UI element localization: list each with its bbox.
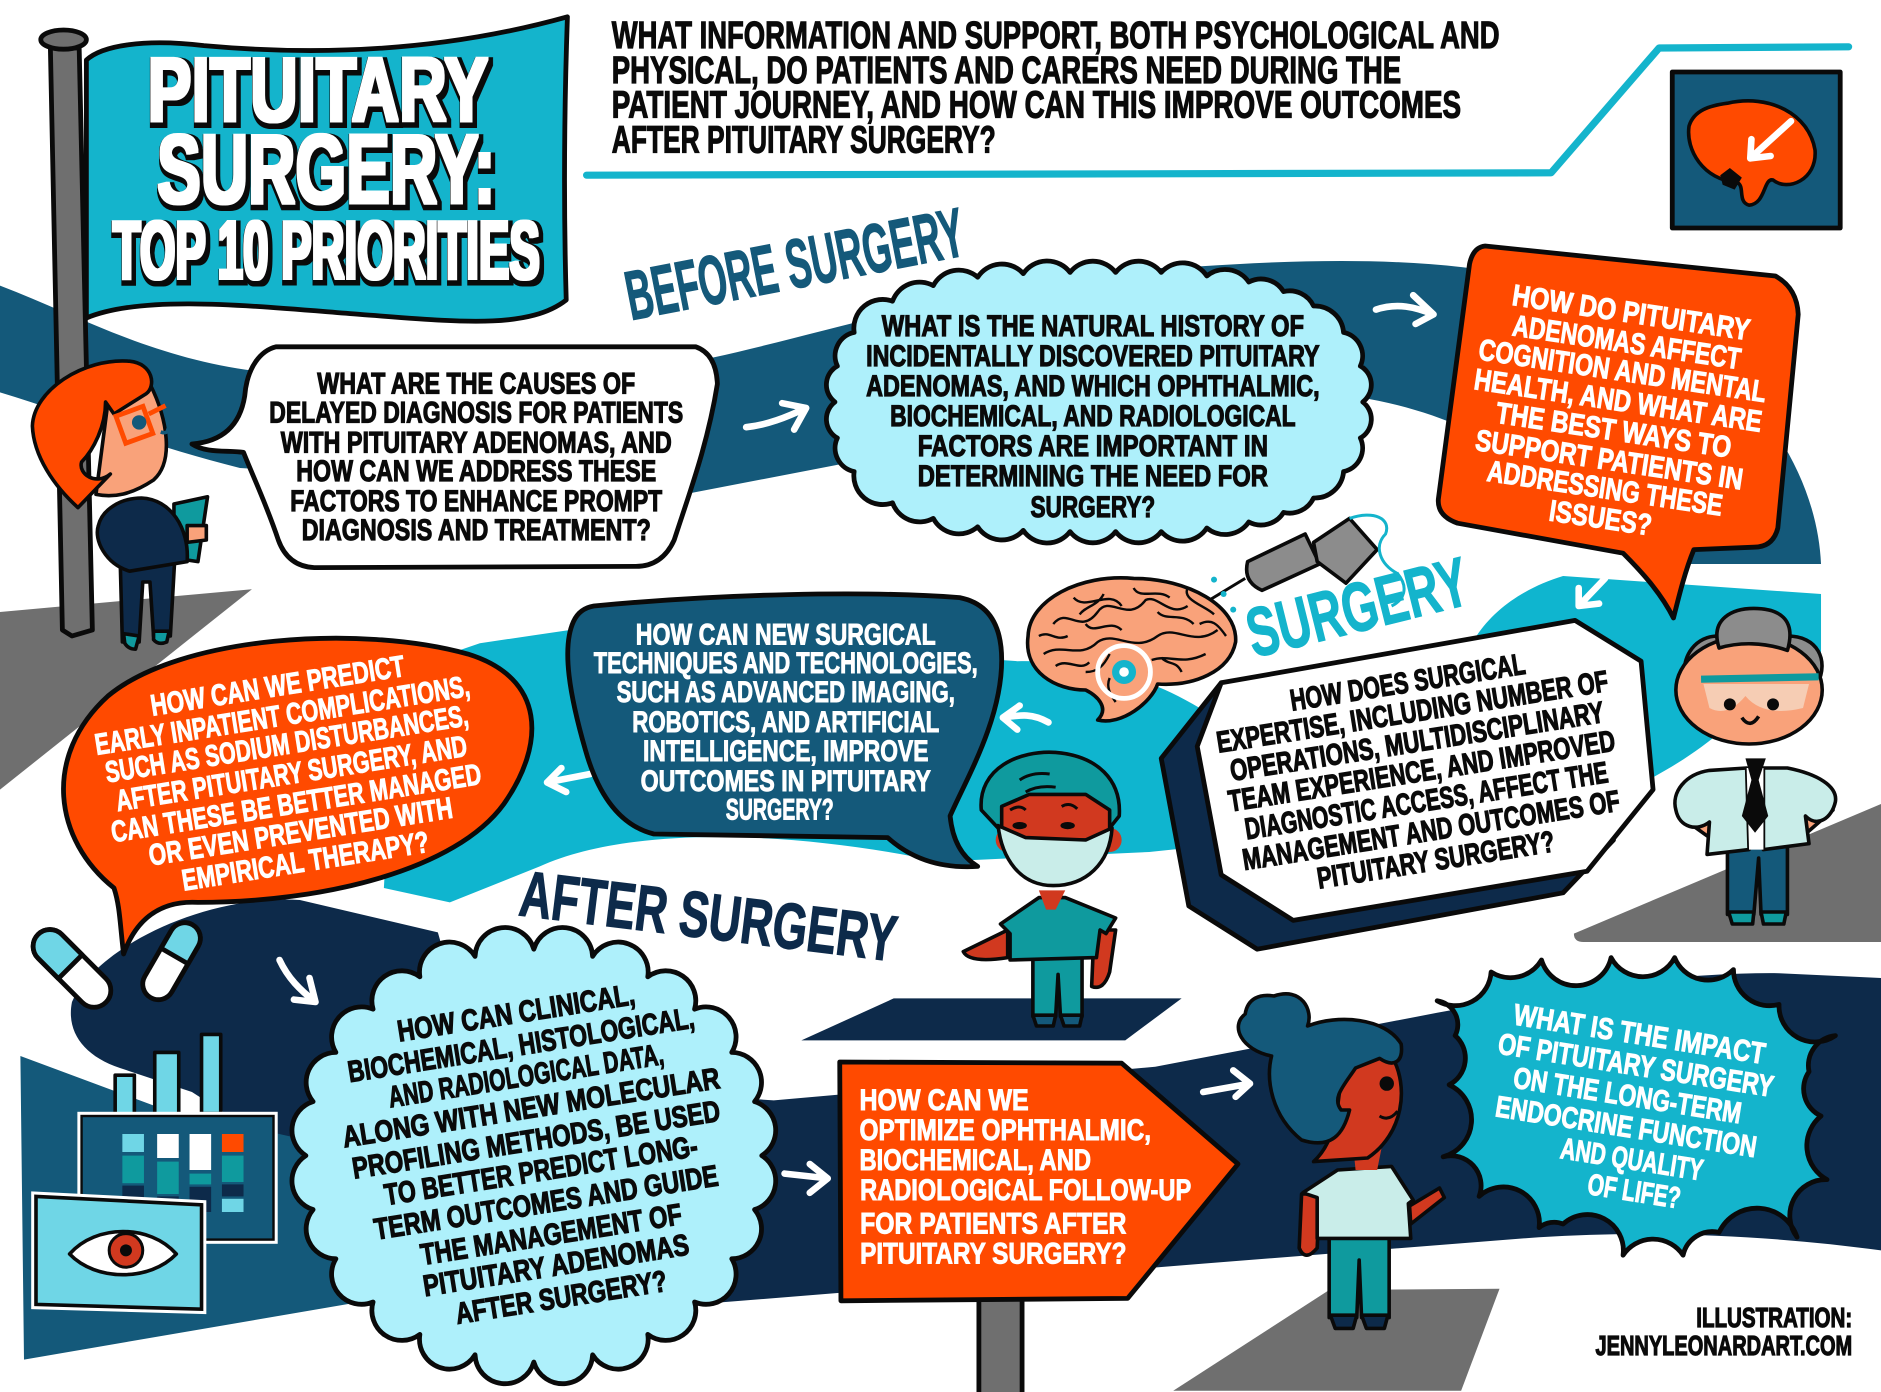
question 7: cloud bubble: HOW CAN CLINICAL, bbox=[395, 978, 637, 1049]
tie bbox=[1742, 758, 1768, 833]
question 7: cloud bubble: TO BETTER PREDICT LONG- bbox=[382, 1130, 700, 1212]
question 7: cloud bubble: AFTER SURGERY? bbox=[453, 1265, 669, 1331]
floor: right patient grey bbox=[1173, 1289, 1500, 1391]
question 1: white speech bubble bbox=[192, 347, 717, 568]
flag cloth bbox=[86, 17, 567, 321]
icon: surgical drill bbox=[1200, 515, 1404, 613]
question 6: orange oval speech bubble: AFTER PITUITARY SURGERY, AND bbox=[114, 730, 469, 818]
chart columns bbox=[122, 1134, 244, 1212]
character: woman with clipboard bbox=[32, 361, 208, 649]
question 8: orange arrow sign bbox=[840, 1062, 1238, 1392]
question 5: dark teal speech bubble bbox=[568, 594, 1002, 867]
question 6: orange oval speech bubble: CAN THESE BE BETTER MANAGED bbox=[109, 758, 484, 849]
question 8: orange arrow sign: FOR PATIENTS AFTER bbox=[860, 1208, 1127, 1241]
eye bbox=[70, 1232, 176, 1275]
question 9: spiky burst: AND QUALITY bbox=[1558, 1132, 1705, 1187]
question 2: cloud bubble bbox=[826, 261, 1371, 543]
shirt bbox=[1747, 768, 1763, 850]
question 3: orange speech bubble bbox=[1438, 246, 1798, 618]
flag pole bbox=[50, 48, 92, 636]
question 3: orange speech bubble: ADDRESSING THESE bbox=[1485, 455, 1725, 523]
header question bbox=[612, 14, 1500, 161]
ribbon: before surgery band bbox=[0, 261, 1821, 564]
question 3: orange speech bubble: HOW DO PITUITARY bbox=[1510, 279, 1752, 347]
question 1: white speech bubble: FACTORS TO ENHANCE PROMPT bbox=[290, 485, 662, 518]
glasses bbox=[116, 406, 166, 443]
question 2: cloud bubble: BIOCHEMICAL, AND RADIOLOGICAL bbox=[890, 400, 1296, 433]
question 5: dark teal speech bubble: ROBOTICS, AND ARTIFICIAL bbox=[632, 706, 939, 739]
question 7: cloud bubble: BIOCHEMICAL, HISTOLOGICAL, bbox=[346, 1002, 697, 1089]
question 8: orange arrow sign: RADIOLOGICAL FOLLOW-UP bbox=[860, 1174, 1191, 1207]
question 4: white octagon with navy shadow: OPERATIONS, MULTIDISCIPLINARY bbox=[1228, 696, 1606, 788]
question 9: spiky burst: ENDOCRINE FUNCTION bbox=[1493, 1090, 1759, 1164]
heading: before surgery: BEFORE SURGERY bbox=[619, 193, 971, 335]
question 4: white octagon with navy shadow: EXPERTISE, INCLUDING NUMBER OF bbox=[1214, 665, 1610, 760]
question 5: dark teal speech bubble: INTELLIGENCE, IMPROVE bbox=[643, 735, 929, 768]
face bbox=[1002, 794, 1110, 840]
hair bbox=[32, 361, 152, 508]
right arm bbox=[1410, 1188, 1444, 1224]
question 3: orange speech bubble: ISSUES? bbox=[1547, 495, 1654, 542]
trousers bbox=[1727, 840, 1787, 914]
feet bbox=[124, 631, 169, 649]
pole cap bbox=[41, 30, 86, 49]
chart box bbox=[79, 1114, 276, 1242]
floor: surgeon navy bbox=[801, 998, 1182, 1040]
lab coat right bbox=[1763, 768, 1836, 850]
arrow: to question 7 bbox=[280, 960, 315, 1002]
eye bbox=[132, 415, 146, 430]
arrow: to question 9 bbox=[1203, 1070, 1250, 1097]
question 5: dark teal speech bubble: SUCH AS ADVANCED IMAGING, bbox=[617, 676, 955, 709]
face bbox=[96, 384, 166, 496]
question 3: orange speech bubble: HEALTH, AND WHAT ARE bbox=[1472, 363, 1764, 439]
character: doctor bbox=[1675, 608, 1836, 924]
trousers bbox=[1329, 1234, 1389, 1318]
question 4: white octagon with navy shadow: TEAM EXPERIENCE, AND IMPROVED bbox=[1226, 725, 1617, 819]
header question: PHYSICAL, DO PATIENTS AND CARERS NEED DURING THE bbox=[612, 49, 1401, 92]
question 1: white speech bubble: DELAYED DIAGNOSIS FOR PATIENTS bbox=[269, 396, 683, 429]
question 2: cloud bubble: INCIDENTALLY DISCOVERED PITUITARY bbox=[866, 340, 1320, 373]
header teal line bbox=[587, 47, 1849, 175]
question 4: white octagon with navy shadow: HOW DOES SURGICAL bbox=[1288, 648, 1528, 718]
character: patient from behind bbox=[1238, 994, 1444, 1328]
question 5: dark teal speech bubble: SURGERY? bbox=[726, 794, 834, 827]
head bbox=[1676, 636, 1822, 744]
cap bbox=[981, 752, 1119, 828]
question 9: spiky burst: WHAT IS THE IMPACT bbox=[1511, 999, 1768, 1071]
question 2: cloud bubble: DETERMINING THE NEED FOR bbox=[918, 460, 1268, 493]
question 6: orange oval speech bubble: OR EVEN PREVENTED WITH bbox=[146, 792, 455, 873]
question 4: white octagon with navy shadow bbox=[1161, 620, 1653, 949]
character: surgeon bbox=[963, 752, 1122, 1026]
left arm bbox=[1299, 1194, 1320, 1255]
question 6: orange oval speech bubble: HOW CAN WE PREDICT bbox=[148, 650, 407, 723]
eye bbox=[1380, 1076, 1394, 1091]
icon: brain with target bbox=[1028, 578, 1236, 721]
question 7: cloud bubble: AND RADIOLOGICAL DATA, bbox=[386, 1038, 666, 1114]
left arm bbox=[963, 930, 1008, 960]
arrow: to question 2 bbox=[746, 403, 806, 430]
hands bbox=[1679, 802, 1833, 838]
panel: data and eye icon bbox=[20, 1034, 360, 1360]
clipboard bbox=[174, 497, 208, 562]
question 6: orange oval speech bubble bbox=[63, 638, 532, 954]
body bbox=[97, 498, 187, 571]
arrow: to question 3 bbox=[1376, 295, 1434, 324]
question 3: orange speech bubble: SUPPORT PATIENTS IN bbox=[1473, 424, 1745, 497]
question 7: cloud bubble: ALONG WITH NEW MOLECULAR bbox=[340, 1062, 722, 1154]
question 5: dark teal speech bubble: HOW CAN NEW SURGICAL bbox=[636, 618, 936, 651]
header question: WHAT INFORMATION AND SUPPORT, BOTH PSYCHOLOGICAL AND bbox=[612, 14, 1500, 57]
hair bbox=[1238, 994, 1402, 1143]
question 7: cloud bubble: THE MANAGEMENT OF bbox=[418, 1198, 684, 1272]
shoes bbox=[1330, 1315, 1388, 1328]
title bbox=[113, 39, 540, 296]
question 2: cloud bubble: FACTORS ARE IMPORTANT IN bbox=[918, 430, 1268, 463]
question 4: white octagon with navy shadow: MANAGEMENT AND OUTCOMES OF bbox=[1240, 785, 1622, 877]
shoes bbox=[1729, 912, 1786, 924]
question 3: orange speech bubble: THE BEST WAYS TO bbox=[1494, 397, 1733, 465]
question 2: cloud bubble: WHAT IS THE NATURAL HISTORY OF bbox=[882, 310, 1304, 343]
eyes and smile bbox=[1724, 698, 1736, 710]
face bbox=[1314, 1056, 1401, 1162]
question 6: orange oval speech bubble: EARLY INPATIENT COMPLICATIONS, bbox=[93, 670, 472, 762]
arrow: to question 4 bbox=[1579, 578, 1605, 606]
hair top bbox=[1717, 608, 1790, 650]
question 6: orange oval speech bubble: EMPIRICAL THERAPY? bbox=[180, 826, 431, 898]
sign board bbox=[840, 1062, 1238, 1301]
question 3: orange speech bubble: ADENOMAS AFFECT bbox=[1510, 310, 1743, 376]
question 8: orange arrow sign: OPTIMIZE OPHTHALMIC, bbox=[860, 1114, 1151, 1147]
question 9: spiky burst: OF LIFE? bbox=[1585, 1168, 1683, 1215]
question 7: cloud bubble: PITUITARY ADENOMAS bbox=[421, 1229, 691, 1303]
lab coat left bbox=[1675, 768, 1749, 854]
header question: PATIENT JOURNEY, AND HOW CAN THIS IMPROVE OUTCOMES bbox=[612, 84, 1461, 127]
question 6: orange oval speech bubble: SUCH AS SODIUM DISTURBANCES, bbox=[103, 699, 471, 789]
question 1: white speech bubble: HOW CAN WE ADDRESS THESE bbox=[296, 455, 656, 488]
header question: AFTER PITUITARY SURGERY? bbox=[612, 118, 996, 161]
question 8: orange arrow sign: PITUITARY SURGERY? bbox=[860, 1238, 1126, 1271]
question 7: cloud bubble bbox=[292, 928, 776, 1384]
scrub top bbox=[1000, 898, 1116, 960]
grey hair sides bbox=[1684, 636, 1822, 684]
title: PITUITARY bbox=[148, 39, 488, 141]
question 1: white speech bubble: WITH PITUITARY ADENOMAS, AND bbox=[281, 426, 672, 459]
legs bbox=[120, 552, 175, 642]
neck bbox=[1039, 890, 1065, 910]
bars above chart bbox=[115, 1034, 221, 1116]
ribbon: after surgery band bbox=[71, 900, 1881, 1304]
question 7: cloud bubble: PROFILING METHODS, BE USED bbox=[350, 1095, 722, 1186]
arrow: to question 5 bbox=[1003, 706, 1048, 730]
title: SURGERY: bbox=[157, 114, 495, 224]
question 4: white octagon with navy shadow: DIAGNOSTIC ACCESS, AFFECT THE bbox=[1243, 756, 1610, 846]
question 5: dark teal speech bubble: OUTCOMES IN PITUITARY bbox=[641, 765, 931, 798]
sign post bbox=[979, 1298, 1022, 1392]
floor: doctor grey bbox=[1574, 804, 1881, 942]
teal backing panel bbox=[20, 1056, 360, 1360]
shirt bbox=[1303, 1166, 1413, 1238]
title: TOP 10 PRIORITIES bbox=[113, 203, 540, 296]
shoes bbox=[1033, 1015, 1082, 1026]
hand bbox=[187, 526, 206, 542]
credit bbox=[1595, 1302, 1852, 1361]
mask bbox=[998, 826, 1112, 886]
glasses bbox=[1703, 684, 1809, 711]
neck bbox=[1353, 1146, 1382, 1170]
question 8: orange arrow sign: BIOCHEMICAL, AND bbox=[860, 1144, 1091, 1177]
question 1: white speech bubble: WHAT ARE THE CAUSES OF bbox=[317, 368, 635, 401]
question 2: cloud bubble: SURGERY? bbox=[1030, 491, 1155, 524]
question 8: orange arrow sign: HOW CAN WE bbox=[860, 1084, 1029, 1117]
question 5: dark teal speech bubble: TECHNIQUES AND TECHNOLOGIES, bbox=[594, 647, 978, 680]
flag with pole bbox=[41, 17, 567, 636]
arrow: to question 6 bbox=[547, 768, 590, 792]
icon: brain scan bbox=[1672, 72, 1840, 228]
question 4: white octagon with navy shadow: PITUITARY SURGERY? bbox=[1315, 826, 1557, 896]
question 3: orange speech bubble: COGNITION AND MENTAL bbox=[1476, 334, 1768, 409]
question 9: spiky burst: OF PITUITARY SURGERY bbox=[1496, 1028, 1776, 1104]
right arm bbox=[1092, 930, 1116, 987]
question 9: spiky burst: ON THE LONG-TERM bbox=[1511, 1062, 1744, 1130]
question 9: spiky burst bbox=[1437, 958, 1835, 1255]
question 2: cloud bubble: ADENOMAS, AND WHICH OPHTHALMIC, bbox=[866, 370, 1320, 403]
eye panel bbox=[36, 1196, 202, 1309]
ribbon: surgery band bbox=[384, 576, 1821, 902]
question 1: white speech bubble: DIAGNOSIS AND TREATMENT? bbox=[302, 514, 651, 547]
trousers bbox=[1033, 954, 1082, 1016]
heading: surgery: SURGERY bbox=[1239, 542, 1476, 672]
heading: after surgery: AFTER SURGERY bbox=[516, 857, 901, 975]
arrow: to question 8 bbox=[785, 1164, 828, 1193]
floor: left grey bbox=[0, 589, 252, 790]
question 7: cloud bubble: TERM OUTCOMES AND GUIDE bbox=[372, 1160, 721, 1247]
icon: pills bbox=[26, 917, 206, 1014]
